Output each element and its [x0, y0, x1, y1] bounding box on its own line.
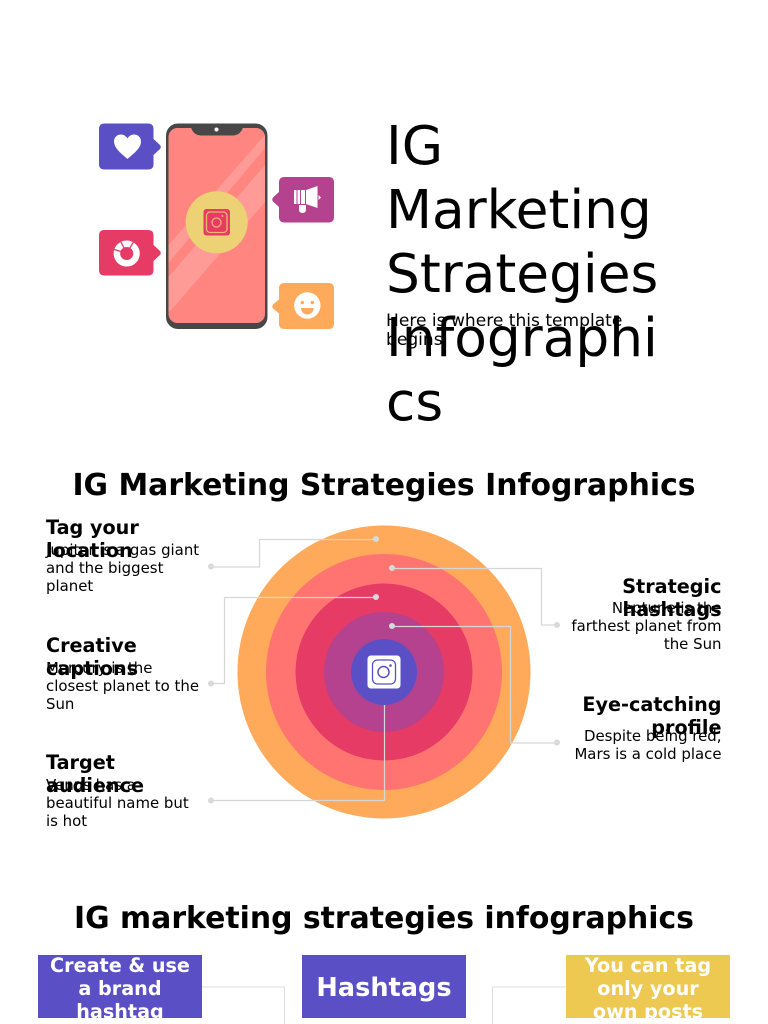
label description: and the biggest — [46, 559, 163, 577]
label description: farthest planet from — [571, 617, 722, 635]
label heading — [622, 575, 722, 621]
label heading: captions — [46, 657, 138, 680]
phone body — [166, 124, 268, 329]
ring 3 — [296, 584, 472, 760]
label heading: Eye-catching — [582, 693, 722, 716]
main title: Marketing — [386, 178, 652, 241]
label: tag your location — [45, 516, 199, 595]
label: target audience — [46, 751, 189, 830]
label description: Venus has a — [46, 776, 136, 794]
box: tag your own posts — [566, 955, 730, 1018]
label: strategic hashtags — [571, 575, 722, 653]
label heading — [46, 634, 138, 680]
label heading: location — [46, 538, 133, 562]
ring 1 — [238, 526, 530, 818]
label description: Sun — [46, 695, 74, 713]
label description — [46, 776, 189, 830]
label description — [46, 659, 199, 713]
center circle — [351, 639, 417, 705]
label heading — [582, 693, 722, 739]
label heading: audience — [46, 774, 144, 797]
label description: closest planet to the — [46, 677, 199, 695]
label description: beautiful name but — [46, 794, 189, 812]
label heading: Target — [46, 751, 115, 774]
subtitle: begins — [386, 330, 443, 350]
ring 2 — [266, 554, 502, 790]
subtitle — [386, 311, 622, 350]
label description: planet — [46, 577, 93, 595]
icon: megaphone bubble — [272, 177, 334, 222]
box: hashtags — [302, 955, 466, 1018]
main title: Infographi — [386, 306, 658, 369]
label heading — [46, 516, 139, 562]
label heading — [46, 751, 144, 797]
concentric circle chart — [208, 526, 560, 818]
label description: Neptune is the — [612, 599, 722, 617]
main title: cs — [386, 370, 443, 433]
connector dots — [208, 536, 560, 804]
label description: Jupiter is a gas giant — [46, 541, 199, 559]
icon: instagram — [368, 656, 400, 688]
connector lines — [211, 540, 557, 800]
icon: smiley bubble — [272, 283, 334, 329]
label description — [45, 541, 199, 595]
label description: Mercury is the — [46, 659, 152, 677]
label heading: Creative — [46, 634, 137, 657]
section heading: strategies: IG Marketing Strategies Infographics — [72, 468, 696, 503]
label heading: profile — [651, 716, 722, 739]
label: eye-catching profile — [574, 693, 722, 763]
label: creative captions — [46, 634, 199, 713]
icon: donut chart bubble — [99, 230, 161, 276]
phone notch — [190, 124, 244, 136]
yellow instagram badge — [186, 191, 248, 253]
box: tag your own posts: only your — [597, 976, 699, 1000]
label heading: Strategic — [622, 575, 722, 598]
box: create a brand hashtag — [38, 955, 202, 1018]
main title: IG — [386, 114, 443, 177]
ring 4 — [324, 612, 444, 732]
phone camera — [214, 128, 218, 132]
main title — [386, 114, 658, 433]
label description — [571, 599, 722, 653]
label description: the Sun — [664, 635, 722, 653]
section heading: bottom: IG marketing strategies infographics — [74, 901, 694, 936]
subtitle: Here is where this template — [386, 311, 622, 331]
label heading: hashtags — [623, 598, 722, 621]
bottom connector lines — [202, 987, 566, 1024]
box: create a brand hashtag: a brand — [78, 976, 162, 1000]
icon: heart bubble — [99, 124, 161, 170]
screen reflection — [168, 135, 265, 312]
label description: Despite being red, — [584, 727, 722, 745]
box: hashtags: Hashtags — [316, 972, 452, 1002]
phone illustration — [99, 124, 334, 329]
phone screen — [168, 128, 265, 323]
label description: is hot — [46, 812, 87, 830]
label description: Mars is a cold place — [574, 745, 722, 763]
label heading: Tag your — [46, 516, 139, 538]
label description — [574, 727, 722, 763]
main title: Strategies — [386, 242, 658, 305]
